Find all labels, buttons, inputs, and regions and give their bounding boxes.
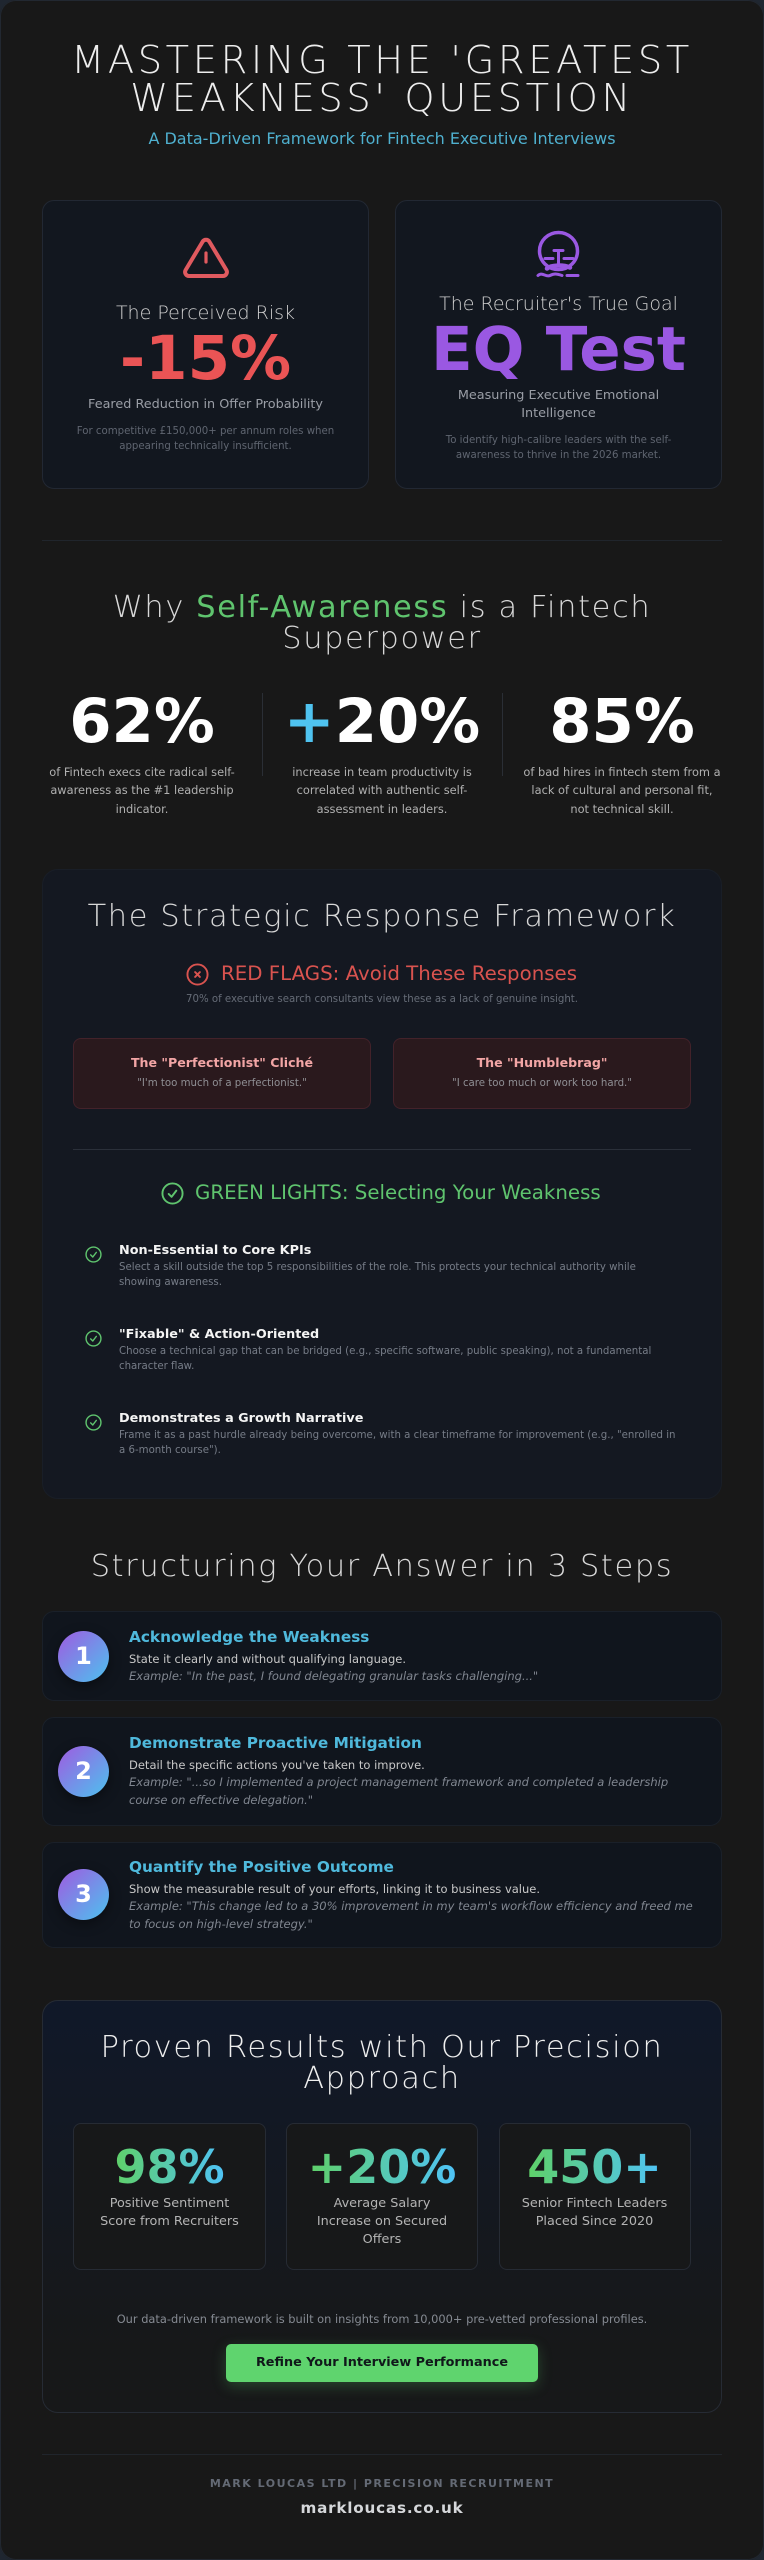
stat: EQ Test: EQ Test <box>431 314 686 385</box>
description: Select a skill outside the top 5 responsibilities of the role. This protects your technical authority while <box>119 1262 636 1272</box>
icon: warning triangle <box>183 238 229 278</box>
recruiter's goal label: Measuring Executive Emotional <box>458 388 659 403</box>
heading: proven results <box>101 2030 663 2096</box>
heading: structuring your answer: Structuring Your Answer in 3 Steps <box>91 1549 673 1584</box>
step 1 detail: State it clearly and without qualifying language. <box>129 1652 406 1666</box>
perceived risk note <box>77 426 334 452</box>
stat +20% description: correlated with authentic self- <box>297 783 467 797</box>
stat 62% description: indicator. <box>116 802 168 816</box>
step 2 title: Demonstrate Proactive Mitigation <box>129 1734 422 1752</box>
list item: non-essential <box>85 1243 636 1288</box>
recruiter's goal label: Intelligence <box>521 406 596 421</box>
description <box>119 1346 651 1372</box>
perceived risk label: Feared Reduction in Offer Probability <box>88 396 323 412</box>
icon: check <box>85 1330 102 1347</box>
metric label: Score from Recruiters <box>100 2214 239 2229</box>
step 3 example: Example: "This change led to a 30% improvement in my team's workflow efficiency and freed me <box>129 1899 693 1913</box>
recruiter's goal note: awareness to thrive in the 2026 market. <box>456 450 661 461</box>
perceived risk heading: The Perceived Risk <box>116 302 295 324</box>
stat: 62% <box>49 687 235 816</box>
recruiter's goal heading: The Recruiter's True Goal <box>439 293 678 315</box>
metric label: Placed Since 2020 <box>536 2214 653 2229</box>
title <box>71 38 693 121</box>
list item: non-essential: Non-Essential to Core KPIs <box>119 1243 311 1258</box>
red flags note: 70% of executive search consultants view these as a lack of genuine insight. <box>186 994 578 1005</box>
description <box>119 1262 636 1288</box>
step 3 detail: Show the measurable result of your efforts, linking it to business value. <box>129 1882 540 1896</box>
perceived risk note: appearing technically insufficient. <box>119 441 292 452</box>
step 3 number: 3 <box>75 1880 92 1908</box>
recruiter's goal label <box>458 388 659 421</box>
list item: growth narrative: Demonstrates a Growth Narrative <box>119 1411 363 1426</box>
step 2 detail: Detail the specific actions you've taken to improve. <box>129 1758 425 1772</box>
stat: +20%: +20% <box>284 687 480 757</box>
step 1 title: Acknowledge the Weakness <box>129 1628 369 1646</box>
metric: 450+: 450+ <box>527 2140 662 2194</box>
stat 85% description <box>523 764 721 816</box>
recruiter's goal note: To identify high-calibre leaders with the self- <box>446 434 671 446</box>
icon: emotional intelligence head <box>536 230 580 278</box>
metric label: Senior Fintech Leaders <box>522 2196 667 2211</box>
description: showing awareness. <box>119 1277 222 1288</box>
step 1 card <box>42 1611 722 1701</box>
step 3 number <box>58 1869 109 1920</box>
stat 85% description: of bad hires in fintech stem from a <box>523 764 721 778</box>
panel: strategic response framework <box>42 869 722 1499</box>
heading: why self-awareness: Why Self-Awareness is a Fintech <box>113 590 651 625</box>
metric label: Increase on Secured <box>317 2214 447 2229</box>
button <box>226 2344 538 2382</box>
heading: proven results: Proven Results with Our Precision <box>101 2030 663 2065</box>
icon: green check circle <box>162 1182 184 1204</box>
stat 85% description: not technical skill. <box>570 802 674 816</box>
icon: red x circle <box>186 964 208 986</box>
red flag card: humblebrag: The "Humblebrag" <box>477 1055 607 1070</box>
step 1 number: 1 <box>75 1642 92 1670</box>
green lights heading: GREEN LIGHTS: Selecting Your Weakness <box>195 1181 601 1204</box>
metric label: Average Salary <box>334 2196 430 2211</box>
metric label: Positive Sentiment <box>110 2196 229 2211</box>
metric: +20% <box>286 2123 478 2270</box>
stat: -15%: -15% <box>120 323 291 394</box>
humblebrag quote: "I care too much or work too hard." <box>452 1078 632 1089</box>
description: character flaw. <box>119 1361 194 1372</box>
perceived risk note: For competitive £150,000+ per annum roles when <box>77 426 334 436</box>
description: a 6-month course"). <box>119 1445 221 1456</box>
step 2 number <box>58 1746 109 1797</box>
stat 62% description: awareness as the #1 leadership <box>50 783 234 797</box>
step 3 title: Quantify the Positive Outcome <box>129 1858 394 1876</box>
step 2 example: course on effective delegation." <box>129 1793 313 1807</box>
red flag card: perfectionist <box>73 1038 371 1109</box>
icon: check <box>85 1414 102 1431</box>
step 2 number: 2 <box>75 1757 92 1785</box>
stat +20% description: increase in team productivity is <box>292 764 472 778</box>
description: Choose a technical gap that can be bridged (e.g., specific software, public speaking), not a fundamental <box>119 1346 651 1356</box>
metric label <box>522 2196 667 2229</box>
subtitle: A Data-Driven Framework for Fintech Executive Interviews <box>148 129 616 148</box>
step 2 card <box>42 1717 722 1826</box>
step 1 number <box>58 1631 109 1682</box>
perfectionist quote: "I'm too much of a perfectionist." <box>137 1078 307 1089</box>
list item: growth narrative <box>85 1411 676 1456</box>
heading: why self-awareness <box>113 590 651 656</box>
step 3 example: to focus on high-level strategy." <box>129 1917 313 1931</box>
stat: 85% <box>523 687 721 816</box>
red flag card: humblebrag <box>393 1038 691 1109</box>
metric: 450+ <box>498 2123 690 2270</box>
heading: strategic response framework: The Strategic Response Framework <box>88 899 676 934</box>
heading: proven results: Approach <box>303 2061 461 2096</box>
list item: fixable <box>85 1327 651 1372</box>
step 3 card <box>42 1842 722 1948</box>
heading: why self-awareness: Superpower <box>282 621 482 656</box>
stat +20% description: assessment in leaders. <box>317 802 447 816</box>
stat +20% description <box>292 764 472 816</box>
step 2 example <box>129 1775 668 1807</box>
metric label <box>100 2196 239 2229</box>
panel: recruiter's true goal <box>395 200 722 489</box>
title: MASTERING THE 'GREATEST <box>71 38 693 83</box>
panel: proven results <box>42 2000 722 2413</box>
icon: check <box>85 1246 102 1263</box>
red flags heading: RED FLAGS: Avoid These Responses <box>221 962 577 985</box>
stat 62% description: of Fintech execs cite radical self- <box>49 764 235 778</box>
list item: fixable: "Fixable" & Action-Oriented <box>119 1327 319 1342</box>
step 1 example: Example: "In the past, I found delegating granular tasks challenging..." <box>129 1669 538 1683</box>
footer company line: MARK LOUCAS LTD | PRECISION RECRUITMENT <box>210 2476 554 2490</box>
metric: +20%: +20% <box>308 2140 456 2194</box>
red flag card: perfectionist: The "Perfectionist" Cliché <box>131 1055 313 1070</box>
data note: Our data-driven framework is built on insights from 10,000+ pre-vetted professional profiles. <box>117 2312 647 2326</box>
panel: the perceived risk <box>42 200 369 489</box>
metric label: Offers <box>363 2232 401 2247</box>
stat: 85%: 85% <box>549 687 695 757</box>
description: Frame it as a past hurdle already being overcome, with a clear timeframe for improvement (e.g., "enrolled in <box>119 1430 676 1440</box>
footer website: markloucas.co.uk <box>300 2498 464 2516</box>
stat: +20% <box>284 687 480 816</box>
metric: 98%: 98% <box>114 2140 225 2194</box>
recruiter's goal note <box>446 434 671 461</box>
metric label <box>317 2196 447 2247</box>
description <box>119 1430 676 1456</box>
stat 85% description: lack of cultural and personal fit, <box>531 783 713 797</box>
stat: 62%: 62% <box>69 687 215 757</box>
step 2 example: Example: "...so I implemented a project management framework and completed a leadership <box>129 1775 668 1789</box>
step 3 example <box>129 1899 693 1931</box>
title: WEAKNESS' QUESTION <box>130 76 634 121</box>
button: Refine Your Interview Performance <box>256 2355 508 2370</box>
metric: 98% <box>73 2123 266 2270</box>
stat 62% description <box>49 764 235 816</box>
